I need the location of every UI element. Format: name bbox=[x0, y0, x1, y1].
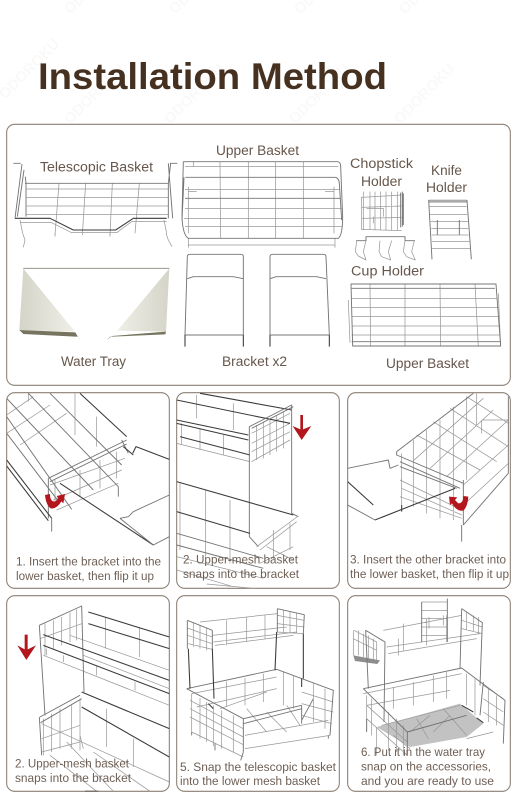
icon: red flip arrow bbox=[45, 494, 65, 508]
panel: step 4 bbox=[7, 596, 169, 791]
step 6 assembled rack illustration bbox=[353, 599, 505, 755]
panel: step 3 bbox=[348, 393, 510, 588]
background watermark bbox=[0, 0, 463, 128]
step 6 caption: 6. Put it in the water tray bbox=[361, 745, 486, 759]
step 1 bracket bbox=[60, 447, 169, 545]
step 3 caption: 3. Insert the other bracket into bbox=[350, 552, 506, 566]
step 1 caption: 1. Insert the bracket into the bbox=[16, 554, 161, 568]
step 6 caption: and you are ready to use bbox=[361, 774, 494, 788]
step 5 caption: 5. Snap the telescopic basket bbox=[180, 760, 337, 774]
step 2 lower basket bbox=[177, 482, 298, 589]
label: Knife Holder: Knife bbox=[431, 163, 462, 178]
panel: parts overview bbox=[7, 124, 510, 385]
step 4 lower basket bbox=[39, 692, 169, 791]
label: Bracket x2: Bracket x2 bbox=[222, 354, 287, 369]
label: Water Tray: Water Tray bbox=[61, 354, 126, 369]
water tray in rack bbox=[377, 704, 483, 747]
background watermark: ODOROKU bbox=[61, 60, 128, 128]
step 6 caption: snap on the accessories, bbox=[361, 760, 491, 774]
label: Cup Holder: Cup Holder bbox=[351, 264, 425, 278]
upper basket top bbox=[182, 162, 343, 248]
step 4 caption: snaps into the bracket bbox=[15, 771, 132, 785]
telescopic basket bbox=[13, 163, 177, 247]
step 1 basket illustration bbox=[7, 393, 169, 532]
background watermark: ODOROKU bbox=[286, 60, 353, 128]
step 6 caption bbox=[361, 745, 494, 788]
icon: red down arrow bbox=[17, 635, 36, 660]
step 2 bracket bbox=[249, 405, 298, 547]
label: Chopstick Holder: Chopstick bbox=[350, 156, 413, 171]
step 3 caption: the lower basket, then flip it up bbox=[350, 567, 509, 581]
panel: step 1 bbox=[7, 393, 169, 588]
label: Telescopic Basket: Telescopic Basket bbox=[40, 160, 153, 174]
step 4 upper basket and bracket bbox=[39, 606, 169, 715]
step 5 assembled rack illustration bbox=[187, 609, 333, 760]
step 1 caption bbox=[16, 554, 161, 583]
step 1 caption: lower basket, then flip it up bbox=[16, 569, 154, 583]
parts panel frame bbox=[7, 124, 510, 385]
step 4 caption: 2. Upper-mesh basket bbox=[15, 756, 130, 770]
step 5 caption: into the lower mesh basket bbox=[180, 774, 321, 788]
label: Knife Holder: Holder bbox=[426, 180, 468, 195]
step 3 caption bbox=[350, 552, 509, 581]
icon: red flip arrow bbox=[449, 496, 468, 511]
step 3 basket illustration bbox=[397, 393, 508, 542]
step 3 bracket bbox=[348, 460, 455, 520]
background watermark: ODOROKU bbox=[161, 60, 228, 128]
chopstick holder bbox=[362, 192, 403, 231]
label: Chopstick Holder: Holder bbox=[361, 174, 403, 189]
step 2 caption: 2. Upper-mesh basket bbox=[183, 552, 299, 566]
step 2 caption bbox=[183, 552, 300, 581]
upper basket lower bbox=[348, 284, 501, 347]
label: Knife Holder bbox=[426, 163, 468, 195]
cup holder part bbox=[355, 237, 415, 260]
panel: step 2 bbox=[177, 393, 339, 589]
step 4 caption bbox=[15, 756, 132, 785]
water tray bbox=[19, 268, 169, 340]
panel: step 6 bbox=[348, 596, 510, 791]
label: Chopstick Holder bbox=[350, 156, 413, 189]
background watermark: ODOROKU bbox=[391, 60, 458, 128]
label: Upper Basket: Upper Basket bbox=[216, 143, 299, 158]
bracket pair bbox=[185, 254, 329, 347]
label: Upper Basket lower: Upper Basket bbox=[386, 356, 469, 371]
panel: step 5 bbox=[177, 596, 339, 791]
step 2 caption: snaps into the bracket bbox=[183, 567, 300, 581]
icon: red down arrow bbox=[293, 415, 311, 440]
step 5 caption bbox=[180, 760, 337, 788]
knife holder bbox=[429, 200, 471, 259]
step 2 upper basket bbox=[177, 393, 292, 462]
title: Installation Method bbox=[38, 56, 387, 97]
